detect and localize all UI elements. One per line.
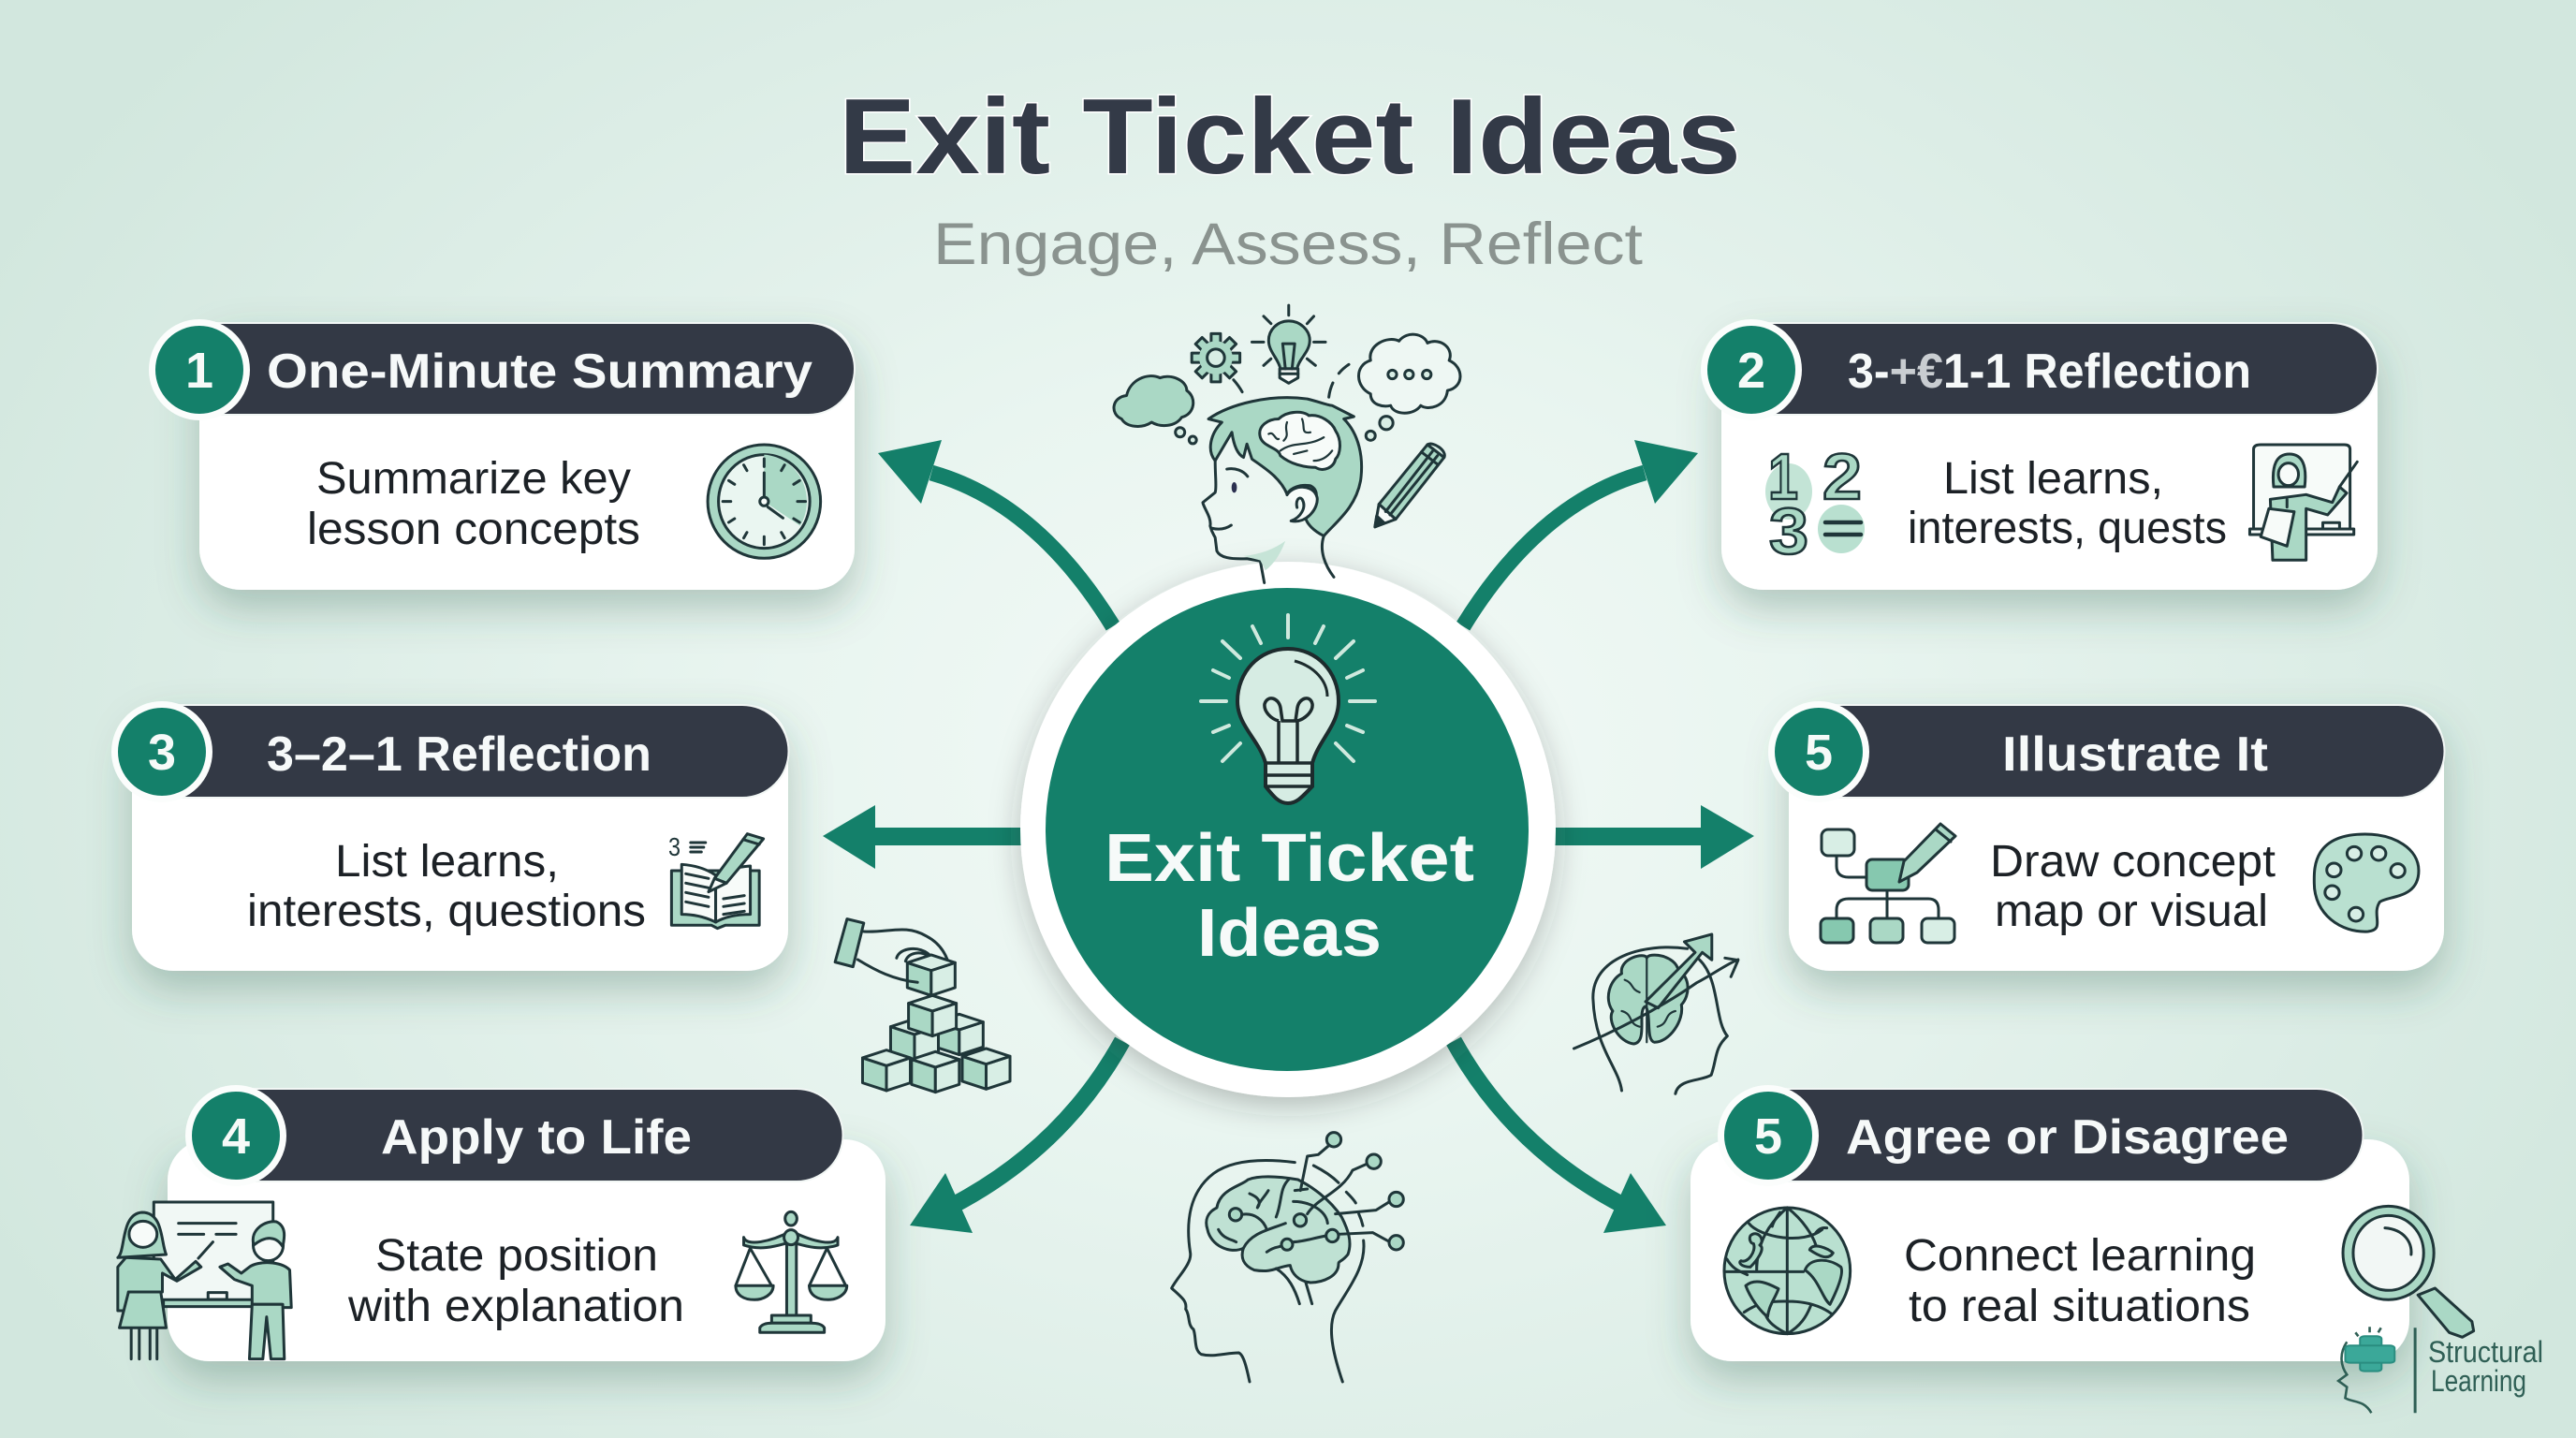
number badge: 5 — [1805, 725, 1833, 781]
card text: interests, quests — [1908, 504, 2227, 553]
card text: Summarize key — [316, 454, 631, 504]
icon: right thought cloud — [1359, 334, 1460, 440]
number badge — [149, 319, 250, 420]
card header — [1819, 705, 2445, 798]
card text: Draw concept — [1990, 837, 2276, 887]
panel: Illustrate It — [1768, 701, 2445, 971]
card text: map or visual — [1995, 887, 2268, 936]
card text — [1904, 1231, 2256, 1331]
number badge — [1718, 1085, 1819, 1186]
logo: Structural Learning: Structural — [2428, 1335, 2543, 1369]
icon: magnifying glass — [2343, 1206, 2474, 1337]
number badge: 3 — [148, 725, 176, 781]
subtitle: Engage, Assess, Reflect — [933, 212, 1644, 277]
icon: paint palette — [2314, 834, 2419, 932]
card text: lesson concepts — [307, 505, 640, 554]
card text: to real situations — [1909, 1282, 2250, 1331]
number badge — [1768, 701, 1869, 802]
icon: numbers 1 2 3 =: 2 — [1822, 440, 1862, 513]
icon: brain — [1260, 412, 1339, 469]
card header: Illustrate It — [2002, 727, 2268, 782]
card body — [1690, 1139, 2409, 1361]
number badge — [1701, 319, 1802, 420]
circle label: Exit Ticket — [1105, 821, 1474, 896]
card text: List learns, — [1943, 454, 2163, 504]
number badge: 4 — [222, 1108, 250, 1165]
icon: balance scales — [736, 1211, 847, 1332]
panel: 3-1-1 Reflection — [1701, 319, 2378, 590]
panel: 3-2-1 Reflection — [111, 701, 788, 971]
card text: List learns, — [335, 837, 559, 887]
number badge — [185, 1085, 286, 1186]
card header: One-Minute Summary — [267, 345, 812, 399]
card header: Agree or Disagree — [1846, 1110, 2289, 1165]
card header: 3-+€1-1 Reflection — [1848, 345, 2251, 399]
icon: teacher and student at board — [118, 1202, 291, 1359]
icon: numbers 1 2 3 = — [1765, 440, 1865, 567]
card text — [307, 454, 640, 554]
icon: pencil — [1375, 444, 1444, 527]
card text: State position — [375, 1231, 658, 1281]
icon: small bulb — [1251, 305, 1325, 383]
illustration: head with growth arrow — [1573, 934, 1738, 1093]
card text: with explanation — [347, 1282, 684, 1331]
card header — [1768, 1089, 2363, 1181]
title: Exit Ticket Ideas — [839, 78, 1741, 197]
card text — [247, 837, 646, 936]
card text — [1908, 454, 2227, 553]
card text — [1990, 837, 2276, 936]
card body — [132, 705, 788, 971]
arrow: to card 6 — [1454, 1041, 1666, 1233]
panel: Agree or Disagree — [1690, 1085, 2474, 1361]
icon: numbers 1 2 3 =: 3 — [1769, 494, 1808, 567]
panel: One-Minute Summary — [149, 319, 855, 590]
icon: globe — [1724, 1208, 1851, 1334]
central circle — [1020, 562, 1556, 1097]
card header — [1751, 323, 2378, 415]
icon: central light bulb — [1201, 615, 1375, 803]
card header — [236, 1089, 842, 1181]
icon: concept map — [1821, 824, 1955, 943]
number badge — [111, 701, 212, 802]
card text — [347, 1231, 684, 1331]
circle label — [1105, 821, 1474, 971]
card text: Connect learning — [1904, 1231, 2256, 1281]
card header: Apply to Life — [381, 1110, 692, 1165]
icon: clock — [708, 445, 821, 558]
icon: brain — [1608, 955, 1688, 1044]
number badge: 1 — [185, 343, 213, 399]
arrow: to card 1 — [878, 440, 1113, 626]
card header: 3–2–1 Reflection — [267, 727, 651, 782]
circle label: Ideas — [1197, 896, 1382, 971]
icon: gear — [1192, 333, 1240, 382]
logo: Structural Learning: Learning — [2431, 1364, 2526, 1398]
logo: Structural Learning — [2338, 1327, 2543, 1413]
arrow: to card 4 — [910, 1041, 1122, 1233]
card body — [168, 1139, 886, 1361]
card header — [162, 705, 788, 798]
arrow: to card 2 — [1463, 440, 1698, 626]
arrow: to card 5 illustrate — [1546, 805, 1754, 869]
number badge: 2 — [1737, 343, 1765, 399]
card body — [1721, 323, 2378, 590]
icon: hand — [835, 919, 947, 982]
icon: open book and pencil: 3 — [668, 832, 681, 861]
illustration: brain with circuit nodes — [1172, 1133, 1403, 1382]
icon: teacher at board — [2249, 445, 2357, 560]
icon: open book and pencil — [668, 832, 764, 929]
illustration: student thinking head — [1114, 305, 1460, 582]
icon: left thought cloud — [1114, 376, 1196, 444]
card text: interests, questions — [247, 887, 646, 936]
card body — [1789, 705, 2444, 971]
arrow: to card 3 — [823, 805, 1030, 869]
illustration: hand placing blocks — [835, 919, 1010, 1093]
panel: Apply to Life — [118, 1085, 886, 1361]
number badge: 5 — [1754, 1108, 1782, 1165]
card header — [199, 323, 855, 415]
icon: numbers 1 2 3 =: 1 — [1768, 440, 1798, 513]
card body — [199, 323, 855, 590]
